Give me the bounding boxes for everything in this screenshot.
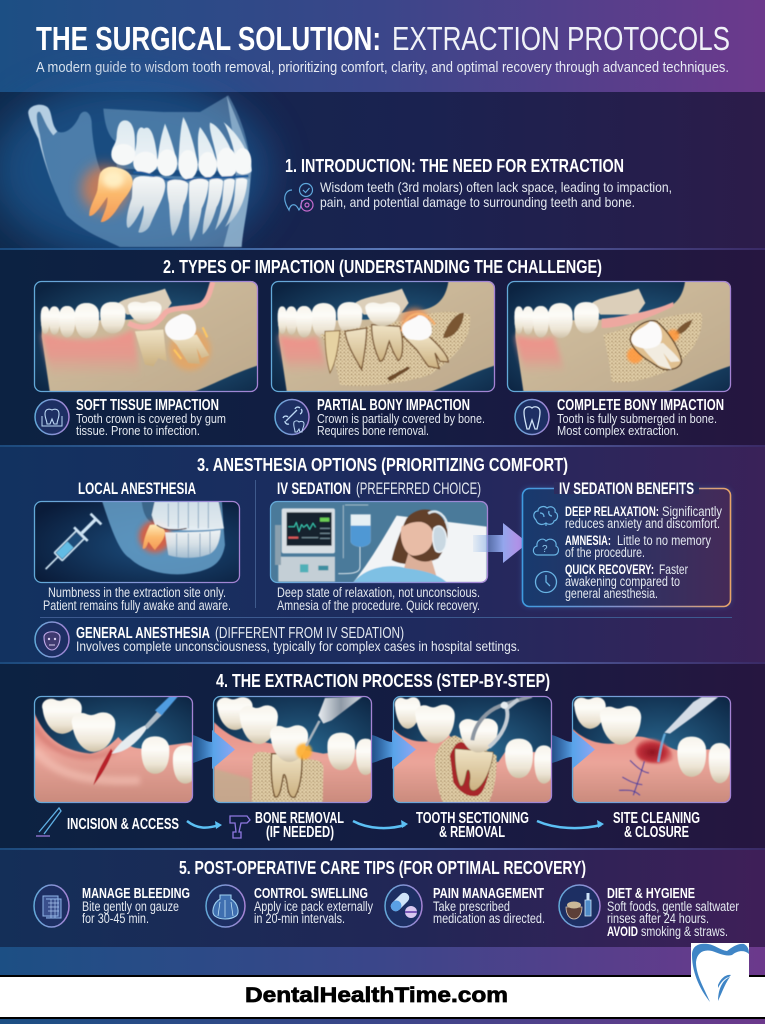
arrow: curved 3 (537, 820, 604, 828)
icon: gauze (34, 885, 69, 927)
intro text: Wisdom teeth (3rd molars) often lack space, leading to impaction, (320, 179, 672, 195)
label: site cleaning (613, 810, 700, 841)
text: partial bony impaction (317, 397, 485, 438)
icon: cloud question: ? (542, 544, 548, 555)
text: deep relaxation: DEEP RELAXATION: (565, 504, 659, 519)
panel: introduction (0, 80, 765, 260)
text: control swelling: CONTROL SWELLING (254, 885, 368, 902)
card: partial bony (271, 280, 495, 393)
card: complete bony (507, 280, 732, 393)
text: diet and hygiene: rinses after 24 hours. (607, 911, 709, 926)
caption: local anesthesia: Numbness in the extraction site only. (48, 585, 226, 600)
title (36, 20, 730, 57)
label: tooth sectioning: TOOTH SECTIONING (416, 810, 529, 827)
text: soft tissue impaction: tissue. Prone to infection. (76, 423, 200, 438)
local anesthesia heading: LOCAL ANESTHESIA (78, 480, 196, 498)
panel: post-operative care (0, 850, 765, 947)
icon: scalpel (36, 808, 61, 836)
panel: anesthesia options (0, 447, 765, 664)
caption: iv sedation: Amnesia of the procedure. Quick recovery. (277, 598, 480, 613)
label: bone removal: BONE REMOVAL (255, 810, 344, 827)
website: DentalHealthTime.com (245, 984, 508, 1007)
caption: iv sedation: Deep state of relaxation, not unconscious. (277, 585, 480, 600)
text: pain management: PAIN MANAGEMENT (433, 885, 544, 902)
stitches (619, 760, 649, 795)
heading: 2. TYPES OF IMPACTION (UNDERSTANDING THE CHALLENGE) (163, 256, 602, 277)
heading: 4. THE EXTRACTION PROCESS (STEP-BY-STEP) (216, 670, 550, 691)
arrow: curved 2 (353, 820, 408, 828)
general anesthesia text: GENERAL ANESTHESIA (76, 625, 210, 642)
text: control swelling (254, 885, 373, 926)
general anesthesia text: (DIFFERENT FROM IV SEDATION) (215, 625, 404, 642)
label: tooth sectioning: & REMOVAL (439, 824, 505, 841)
arrow: step 2 to 3 (372, 730, 416, 769)
text: deep relaxation (565, 504, 722, 531)
text: complete bony impaction: Tooth is fully submerged in bone. (557, 411, 717, 426)
text: control swelling: Apply ice pack externally (254, 899, 373, 914)
text: quick recovery (565, 562, 688, 601)
logo: tooth (691, 943, 749, 1002)
icon: bone (275, 400, 309, 434)
icon: tooth (515, 400, 549, 434)
text: quick recovery: QUICK RECOVERY: (565, 562, 654, 577)
text: diet and hygiene: smoking & straws. (641, 924, 728, 939)
icon: pills (385, 885, 422, 927)
pillow and patient (353, 510, 487, 582)
icon: brain (534, 507, 558, 526)
caption: local anesthesia: Patient remains fully awake and aware. (43, 598, 231, 613)
label: incision: INCISION & ACCESS (67, 816, 179, 833)
icon: diet (559, 885, 600, 927)
text: manage bleeding (82, 885, 190, 926)
text: complete bony impaction: Most complex extraction. (557, 423, 679, 438)
heading: 5. POST-OPERATIVE CARE TIPS (FOR OPTIMAL RECOVERY) (179, 857, 586, 878)
heading: 3. ANESTHESIA OPTIONS (PRIORITIZING COMFORT) (197, 454, 568, 475)
text: amnesia: AMNESIA: (565, 533, 611, 548)
text: amnesia: Little to no memory (617, 533, 711, 548)
text: partial bony impaction: Requires bone removal. (317, 423, 429, 438)
iv sedation heading: (PREFERRED CHOICE) (356, 480, 481, 498)
arrow: curved 1 (187, 821, 222, 829)
intro text: pain, and potential damage to surrounding teeth and bone. (320, 194, 635, 210)
text: pain management: Take prescribed (433, 899, 510, 914)
text: amnesia: of the procedure. (565, 545, 645, 560)
text: complete bony impaction (557, 397, 724, 438)
text: diet and hygiene: Soft foods, gentle saltwater (607, 899, 739, 914)
text: deep relaxation: Significantly (662, 504, 722, 519)
iv sedation heading (277, 480, 481, 498)
card: bone removal (213, 696, 375, 804)
panel: types of impaction (0, 250, 765, 447)
text: quick recovery: general anesthesia. (565, 586, 658, 601)
label: bone removal (255, 810, 344, 841)
header band (0, 0, 765, 92)
icon: general anesthesia mask (35, 622, 69, 657)
text: pain management: medication as directed. (433, 911, 545, 926)
card: site cleaning (572, 696, 732, 804)
text: diet and hygiene: DIET & HYGIENE (607, 885, 695, 902)
card: tooth sectioning (393, 696, 554, 804)
upper teeth (111, 117, 252, 179)
card: local anesthesia (34, 500, 240, 583)
text: deep relaxation: reduces anxiety and discomfort. (565, 516, 720, 531)
lower teeth (127, 176, 247, 241)
arrow: step 1 to 2 (193, 730, 235, 769)
general anesthesia text (76, 625, 520, 654)
caption: local anesthesia (43, 585, 231, 613)
text: amnesia (565, 533, 711, 560)
general anesthesia text: Involves complete unconsciousness, typically for complex cases in hospital settings. (76, 638, 520, 654)
intro icon (285, 184, 313, 211)
text: control swelling: in 20-min intervals. (254, 911, 345, 926)
icon: drill (230, 816, 250, 838)
label: site cleaning: SITE CLEANING (613, 810, 700, 827)
arrow: to benefits (473, 523, 528, 563)
text: manage bleeding: Bite gently on gauze (82, 899, 179, 914)
wisdom tooth glow (89, 167, 133, 222)
upper crowns (111, 144, 251, 179)
panel: extraction process (0, 664, 765, 850)
arrow: step 3 to 4 (552, 730, 595, 769)
label: tooth sectioning (416, 810, 529, 841)
iv sedation heading: IV SEDATION (277, 480, 351, 498)
text: diet and hygiene: AVOID (607, 924, 638, 939)
panel: iv sedation benefits (522, 480, 731, 607)
intro text (320, 179, 672, 210)
jaw illustration (28, 95, 252, 247)
text: manage bleeding: for 30-45 min. (82, 911, 149, 926)
text: soft tissue impaction: SOFT TISSUE IMPACTION (76, 397, 219, 414)
text: soft tissue impaction (76, 397, 226, 438)
text: quick recovery: Faster (659, 562, 688, 577)
icon: clock (536, 572, 556, 592)
card: incision (34, 696, 198, 804)
text: manage bleeding: MANAGE BLEEDING (82, 885, 190, 902)
card: soft tissue (34, 280, 258, 393)
iv bag (338, 505, 371, 574)
icon: cloud question (533, 539, 558, 555)
caption: iv sedation (277, 585, 480, 613)
monitor (275, 508, 335, 582)
footer band (0, 943, 765, 1024)
title: THE SURGICAL SOLUTION: (36, 20, 381, 57)
intro heading: 1. INTRODUCTION: THE NEED FOR EXTRACTION (285, 155, 624, 176)
label: bone removal: (IF NEEDED) (266, 824, 334, 841)
text: pain management (433, 885, 545, 926)
icon: gum tooth (35, 400, 69, 434)
card: iv sedation (270, 501, 488, 583)
text: quick recovery: awakening compared to (565, 574, 680, 589)
benefits title: IV SEDATION BENEFITS (559, 480, 694, 498)
text: partial bony impaction: PARTIAL BONY IMPACTION (317, 397, 470, 414)
icon: ice pack (206, 885, 245, 927)
icon: syringe (44, 512, 103, 570)
text: soft tissue impaction: Tooth crown is covered by gum (76, 411, 226, 426)
label: site cleaning: & CLOSURE (624, 824, 689, 841)
text: partial bony impaction: Crown is partially covered by bone. (317, 411, 485, 426)
text: diet and hygiene (607, 885, 739, 939)
